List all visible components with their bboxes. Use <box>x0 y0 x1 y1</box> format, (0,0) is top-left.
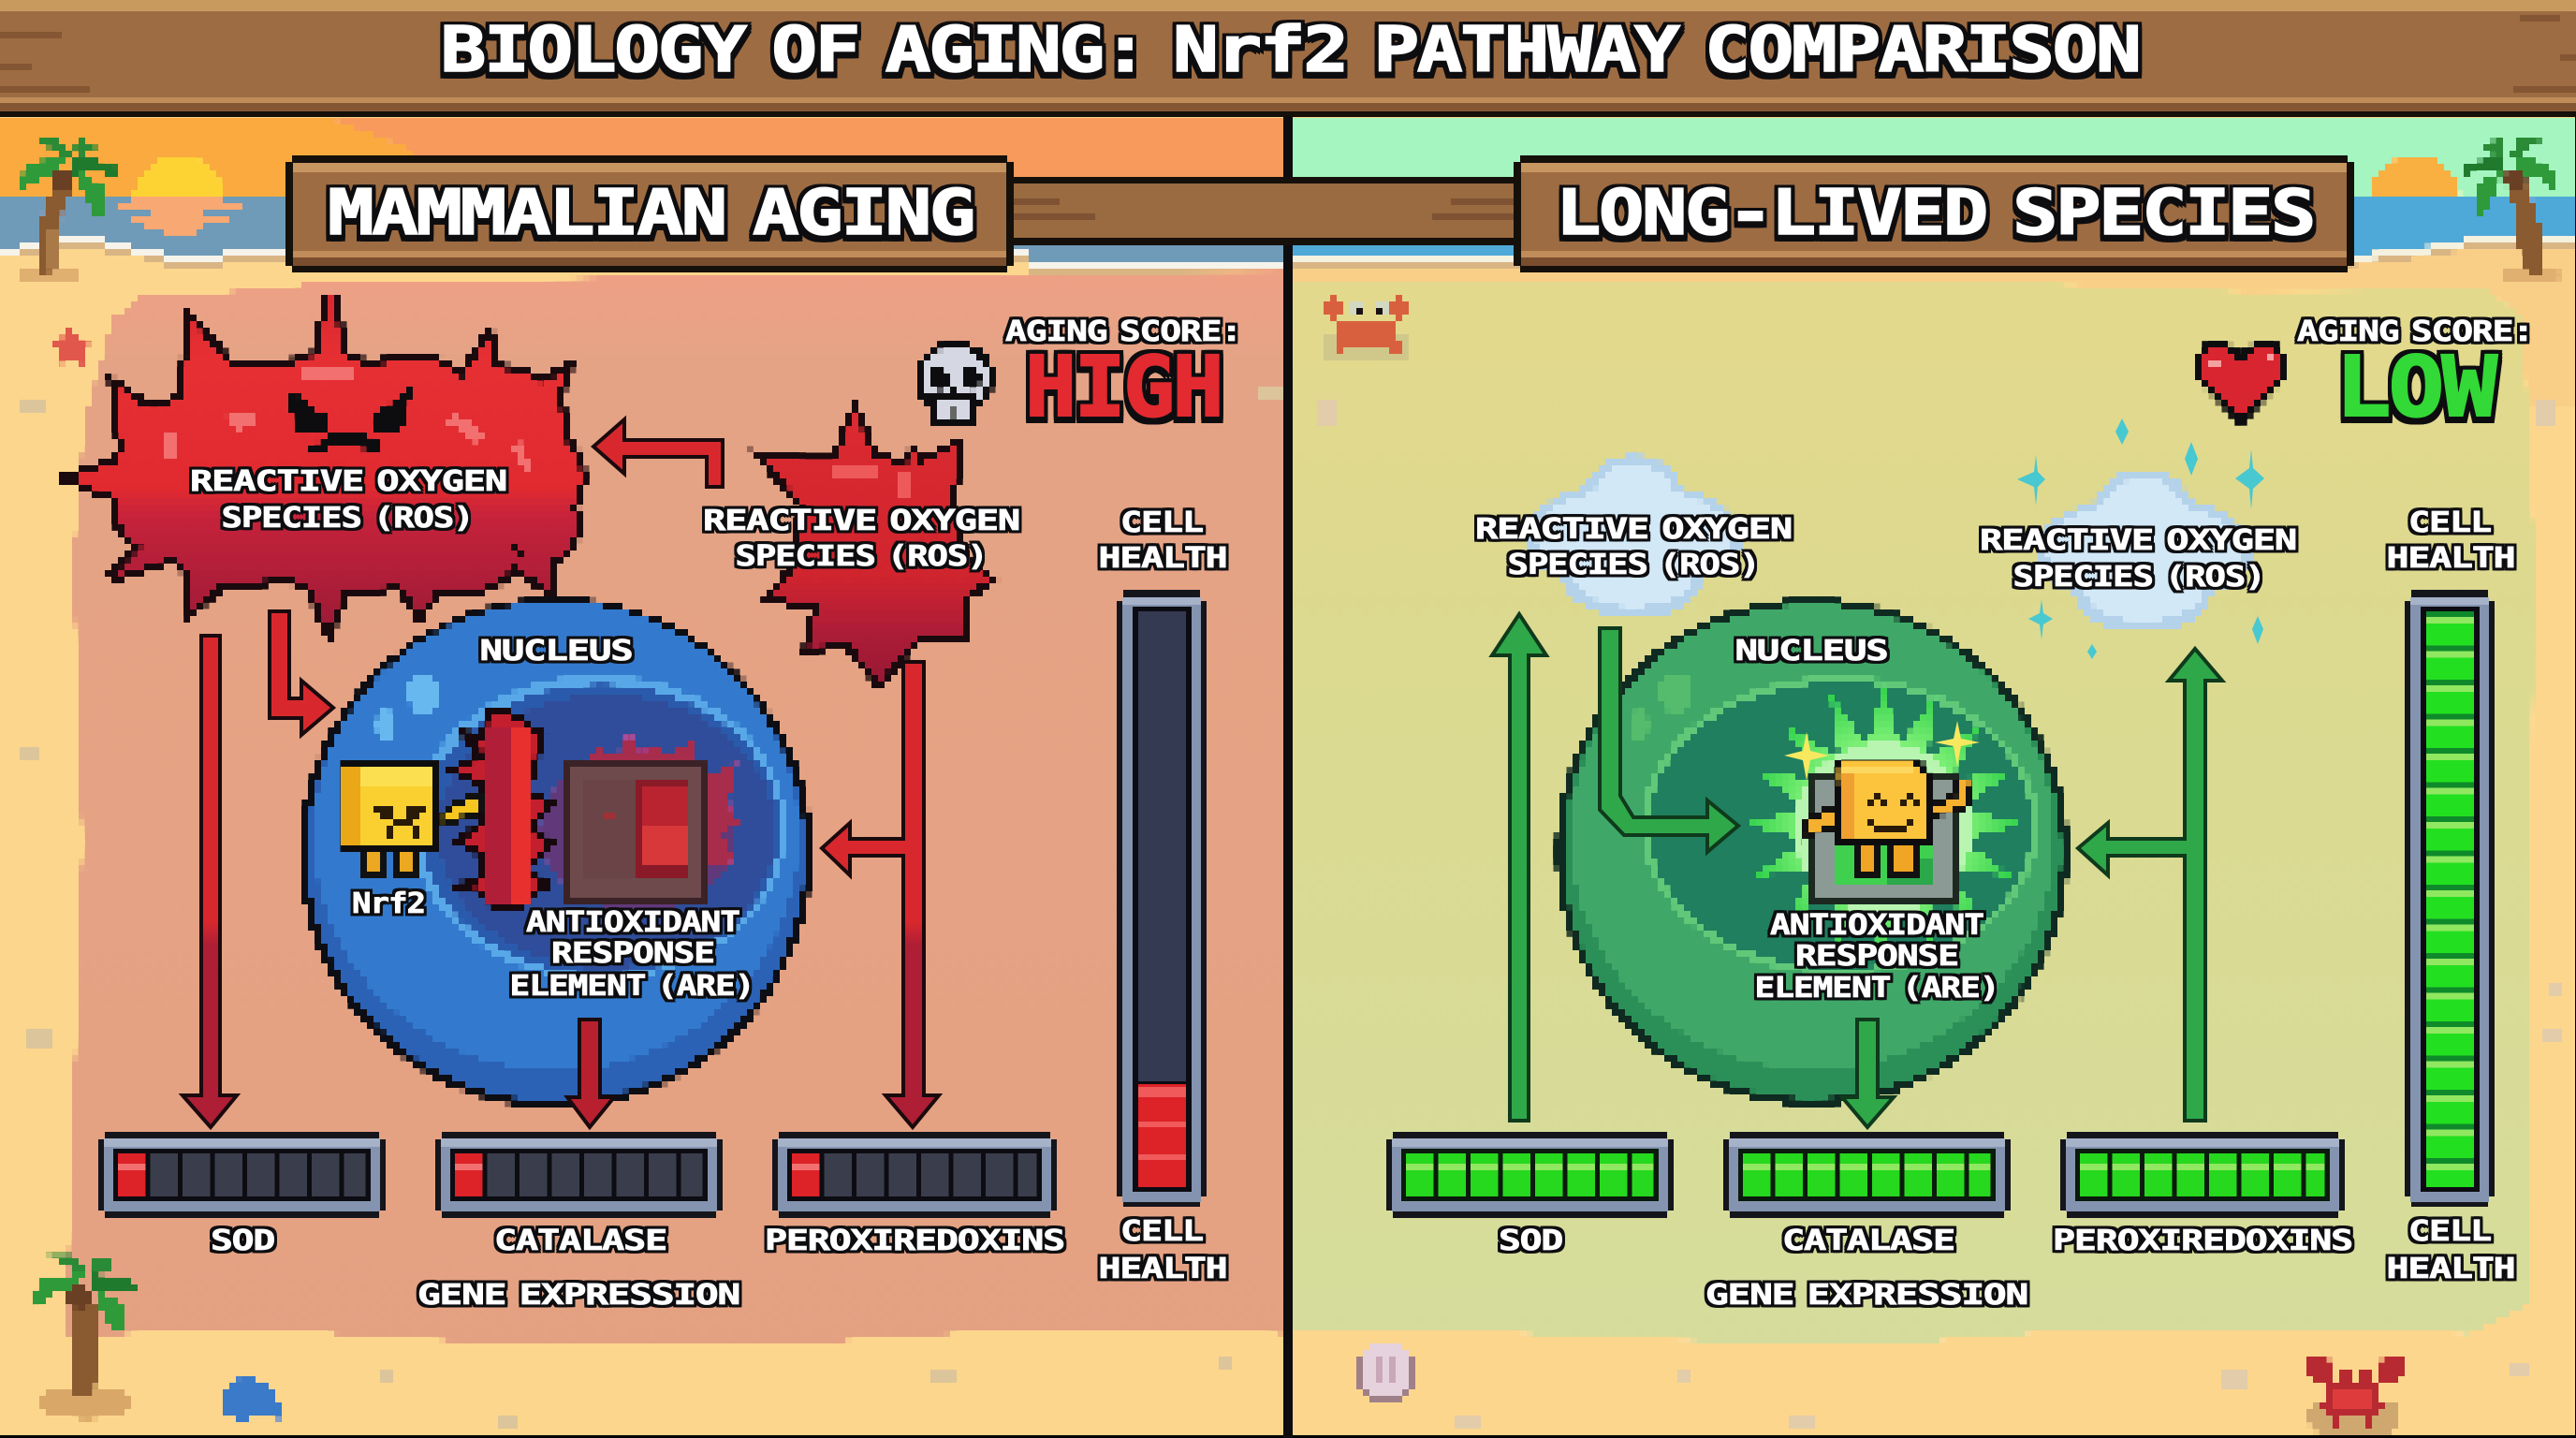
small ROS label: SPECIES (ROS) <box>736 540 987 573</box>
left artwork <box>70 294 994 1105</box>
score: low: AGING SCORE: <box>2297 315 2533 348</box>
icon: heart <box>2196 345 2286 421</box>
left sand top <box>0 249 1284 405</box>
Nrf2 character sad <box>341 766 483 875</box>
icon: palm bottom left <box>33 1255 139 1419</box>
gene labels <box>211 1225 1064 1257</box>
small ROS label <box>703 505 1019 573</box>
score: low <box>2297 315 2533 435</box>
gene labels: PEROXIREDOXINS <box>2053 1225 2352 1257</box>
left tinted panel <box>66 271 1284 1346</box>
sign text: MAMMALIAN AGING <box>328 176 973 249</box>
small ROS label: REACTIVE OXYGEN <box>703 505 1019 537</box>
ARE label: ELEMENT (ARE) <box>1754 972 1999 1005</box>
right sun <box>2369 155 2461 247</box>
left sky <box>0 116 1284 210</box>
ARE switch <box>565 764 706 899</box>
barrier bright side <box>514 727 528 903</box>
score value: HIGH <box>1025 338 1222 435</box>
icon: crab bottom <box>2307 1355 2404 1432</box>
nucleus label: NUCLEUS <box>479 635 633 668</box>
arrow into nucleus <box>1600 628 1738 852</box>
left ROS label: SPECIES (ROS) <box>1507 549 1760 581</box>
up arrow with branch <box>2078 649 2222 1121</box>
angry face <box>285 387 412 433</box>
cell health labels: HEALTH <box>2387 542 2514 575</box>
right ROS label <box>1980 524 2296 594</box>
gene bar: catalase full <box>1723 1132 2011 1218</box>
ARE label: RESPONSE <box>551 937 714 970</box>
nucleus <box>1559 602 2065 1102</box>
left sunset glow <box>0 116 440 210</box>
gene bar: peroxiredoxins low <box>772 1132 1057 1218</box>
small blob highlight <box>833 463 912 499</box>
up arrow from SOD <box>1492 614 1546 1121</box>
cell health bar full <box>2405 590 2495 1207</box>
left sun <box>133 155 225 247</box>
sign: long-lived species <box>1514 155 2354 272</box>
right sand bits <box>1315 403 2565 1431</box>
ARE switch on <box>1814 774 1954 902</box>
gene bar: SOD full <box>1386 1132 1674 1218</box>
central divider <box>1283 116 1293 1438</box>
big ROS label <box>190 465 506 535</box>
small ROS blob <box>755 405 994 686</box>
gene bar: catalase low <box>435 1132 723 1218</box>
left ROS label <box>1475 513 1792 581</box>
ARE label: ANTIOXIDANT <box>1770 909 1983 942</box>
score value: LOW <box>2335 338 2497 435</box>
score: high <box>1005 315 1241 435</box>
gene expression caption: GENE EXPRESSION <box>1705 1279 2027 1312</box>
right cloud <box>2035 469 2252 632</box>
yellow sparkles <box>1784 721 1980 781</box>
left sand bits <box>17 386 1285 1429</box>
right sand top <box>1292 247 2576 404</box>
nucleus <box>303 601 809 1105</box>
icon: starfish <box>49 323 94 367</box>
connecting plank <box>1014 177 1514 245</box>
icon: shell <box>1354 1341 1416 1404</box>
arrow to peroxiredoxins with branch <box>822 662 939 1127</box>
ARE label: ELEMENT (ARE) <box>509 970 754 1003</box>
arrow to SOD <box>183 636 237 1127</box>
sign: mammalian aging <box>285 155 1014 272</box>
green arrows right <box>1492 614 2222 1127</box>
blocking barrier <box>453 712 553 910</box>
gene labels: PEROXIREDOXINS <box>765 1225 1064 1257</box>
right foam <box>1292 236 2576 393</box>
blob highlights <box>165 367 534 472</box>
green burst <box>1743 683 2024 964</box>
right ROS label: REACTIVE OXYGEN <box>1980 524 2296 557</box>
Nrf2 label: Nrf2 <box>352 888 425 920</box>
title text: BIOLOGY OF AGING: Nrf2 PATHWAY COMPARISON <box>440 13 2140 86</box>
ARE label: RESPONSE <box>1795 940 1958 973</box>
gene labels: CATALASE <box>1782 1225 1954 1257</box>
gene labels: SOD <box>1499 1225 1562 1257</box>
title banner <box>0 0 2576 117</box>
nucleus label: NUCLEUS <box>1735 635 1887 668</box>
right ROS label: SPECIES (ROS) <box>2012 561 2265 594</box>
cell health labels: HEALTH <box>1099 1253 1226 1285</box>
arrow to catalase <box>567 1020 614 1127</box>
icon: blue shell <box>221 1376 281 1421</box>
barrier dark front <box>485 727 514 905</box>
cell health labels <box>2387 506 2514 1285</box>
ARE label: ANTIOXIDANT <box>526 906 739 939</box>
ARE label <box>1754 909 1999 1005</box>
cell health labels: HEALTH <box>1099 542 1226 575</box>
panel: long-lived species <box>1386 155 2533 1312</box>
cell health labels: CELL <box>2408 506 2491 539</box>
gene labels <box>1499 1225 2352 1257</box>
red flames <box>585 730 739 866</box>
score: high: AGING SCORE: <box>1005 315 1241 348</box>
cell health labels: HEALTH <box>2387 1253 2514 1285</box>
panel: mammalian aging <box>70 155 1241 1312</box>
arrow to catalase <box>1842 1020 1894 1127</box>
icon: palm top left <box>17 139 119 284</box>
icon: crab top <box>1325 295 1411 359</box>
red arrows left <box>183 419 939 1127</box>
arrow small to big ROS <box>593 419 723 487</box>
left cloud <box>1525 455 1742 618</box>
cell health labels: CELL <box>1120 506 1203 539</box>
icon: skull <box>918 345 991 421</box>
right sea <box>1292 199 2576 274</box>
cell health labels <box>1099 506 1226 1285</box>
big ROS label: REACTIVE OXYGEN <box>190 465 506 498</box>
cell health labels: CELL <box>2408 1215 2491 1248</box>
sparkles around cloud <box>2017 418 2264 659</box>
gene bar: SOD low <box>98 1132 386 1218</box>
big ROS label: SPECIES (ROS) <box>221 502 474 535</box>
right artwork <box>1525 345 2286 1102</box>
frown <box>304 433 386 453</box>
arrow into nucleus <box>270 611 333 735</box>
left sea <box>0 199 1284 274</box>
gene labels: SOD <box>211 1225 274 1257</box>
ARE label <box>509 906 754 1003</box>
Nrf2 character happy <box>1802 760 1972 873</box>
right tinted panel <box>1292 281 2535 1346</box>
sign text: LONG-LIVED SPECIES <box>1556 176 2314 249</box>
red glow <box>540 749 737 914</box>
gene expression caption: GENE EXPRESSION <box>417 1279 739 1312</box>
right sky <box>1292 116 2576 210</box>
gene bar: peroxiredoxins full <box>2060 1132 2345 1218</box>
icon: palm top right <box>2460 139 2562 284</box>
left foam <box>0 237 1284 393</box>
cell health bar low <box>1117 590 1207 1207</box>
burst inner glow <box>1794 742 1972 915</box>
cell health labels: CELL <box>1120 1215 1203 1248</box>
gene labels: CATALASE <box>494 1225 666 1257</box>
big ROS blob <box>70 294 580 630</box>
left sun reflection <box>116 199 242 235</box>
left ROS label: REACTIVE OXYGEN <box>1475 513 1792 546</box>
